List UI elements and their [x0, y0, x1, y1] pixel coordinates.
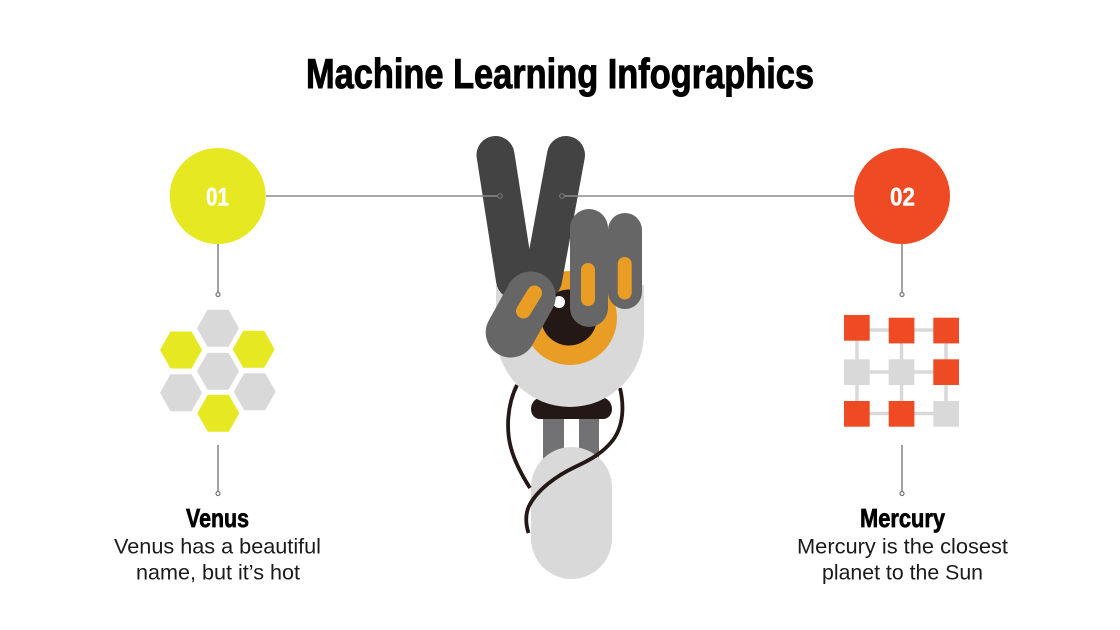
palm — [496, 285, 644, 407]
icon: hexagon cluster — [160, 310, 276, 432]
text block: Mercury: planet to the Sun — [822, 562, 983, 584]
robot lower arm — [531, 415, 612, 579]
text block: Venus — [114, 503, 321, 584]
collar — [531, 398, 612, 419]
text block: Mercury — [797, 503, 1008, 584]
text block: Venus: Venus has a beautiful — [114, 536, 321, 558]
robot hand illustration — [496, 155, 644, 579]
thumb — [511, 293, 534, 332]
title: Machine Learning Infographics — [306, 50, 814, 97]
badge 01: 01 — [206, 184, 229, 212]
connector lines — [216, 194, 904, 495]
folded fingers — [570, 209, 642, 327]
text block: Mercury: Mercury — [860, 503, 945, 533]
wires — [508, 385, 622, 533]
eye — [523, 271, 617, 365]
badge 02 — [854, 148, 950, 244]
raised fingers — [496, 155, 566, 280]
icon: node grid — [844, 315, 959, 427]
badge 02: 02 — [890, 184, 915, 212]
text block: Venus: name, but it’s hot — [136, 562, 300, 584]
badge 01 — [170, 148, 266, 244]
text block: Venus: Venus — [186, 503, 249, 533]
text block: Mercury: Mercury is the closest — [797, 536, 1008, 558]
